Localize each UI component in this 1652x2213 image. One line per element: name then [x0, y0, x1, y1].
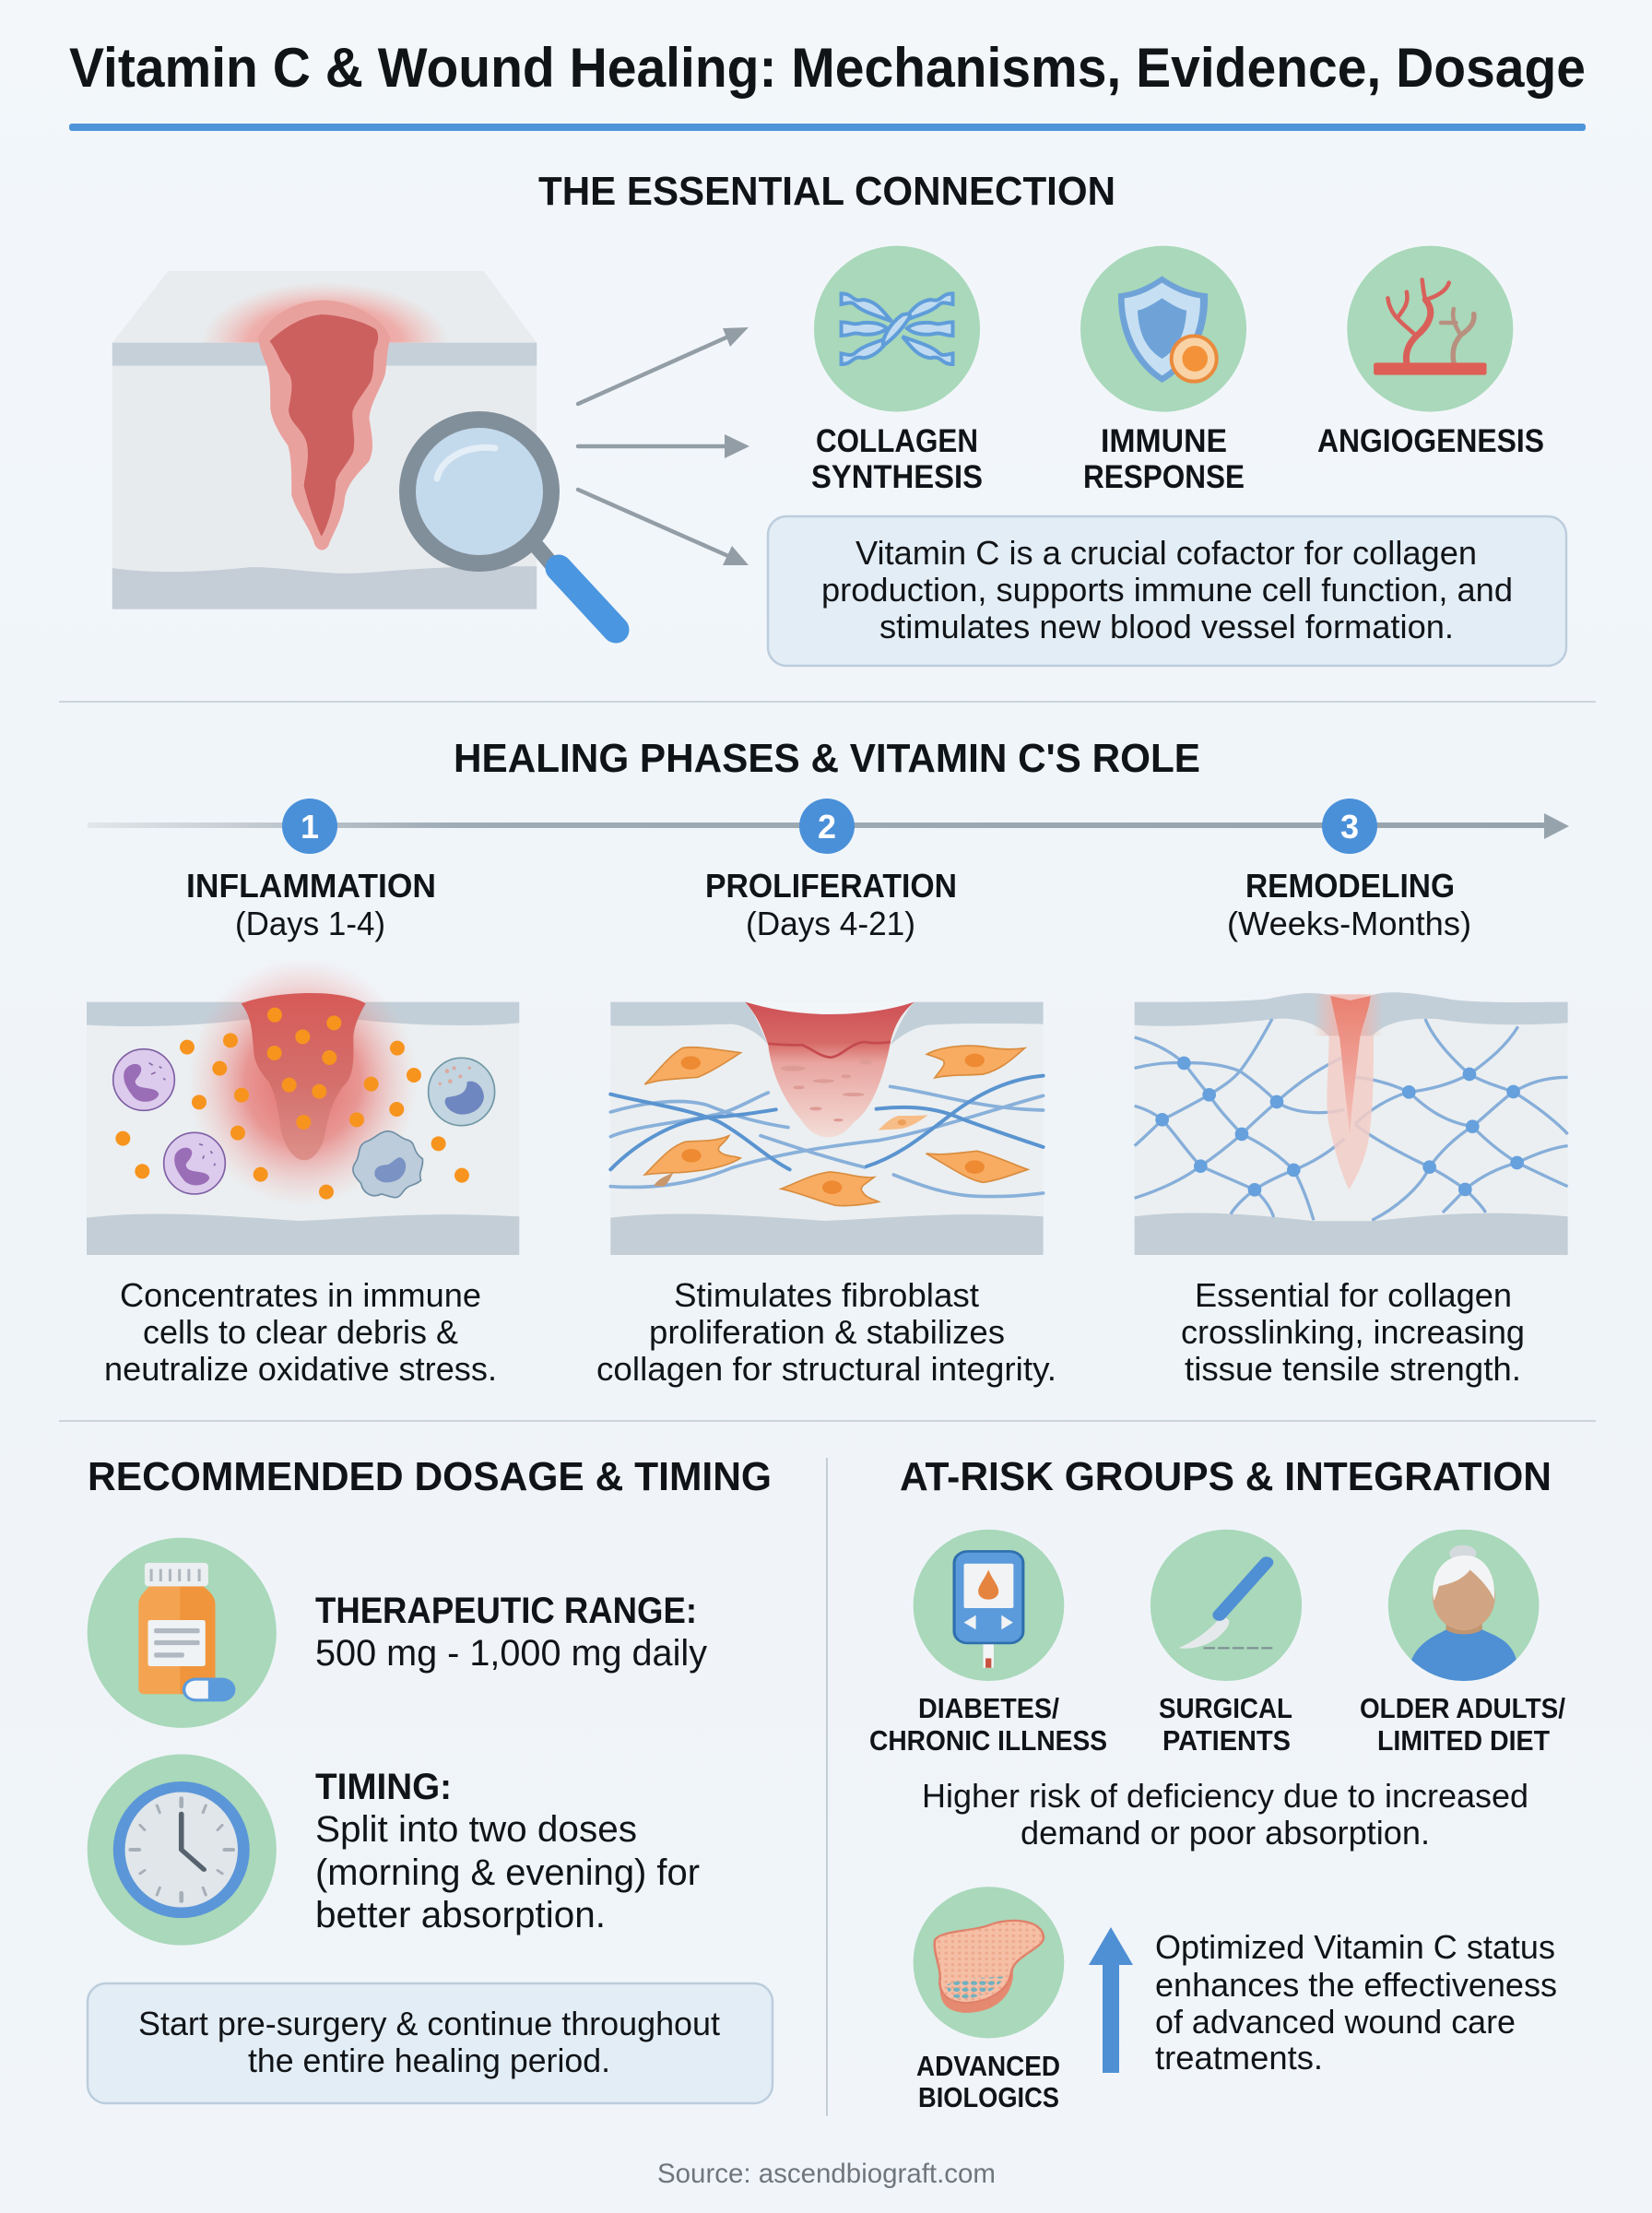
- text: proliferation role: Stimulates fibroblast: [674, 1276, 979, 1314]
- text: inflammation role: [104, 1276, 497, 1388]
- step marker 3: 3: [1340, 808, 1359, 846]
- icon: older adult: [1388, 1530, 1539, 1685]
- callout: start pre-surgery: [88, 1983, 773, 2103]
- phase label: inflammation: (Days 1-4): [235, 905, 385, 942]
- step marker 1: [282, 799, 337, 854]
- text: proliferation role: [596, 1276, 1056, 1388]
- icon: immune shield: [1080, 246, 1246, 412]
- heading: at-risk groups: AT-RISK GROUPS & INTEGRATION: [900, 1454, 1552, 1499]
- text: timing: TIMING:: [315, 1767, 452, 1807]
- step marker 2: [799, 799, 855, 854]
- text: proliferation role: collagen for structural integrity.: [596, 1350, 1056, 1388]
- text: therapeutic range: 500 mg - 1,000 mg daily: [315, 1633, 707, 1674]
- text: optimized vitamin C: enhances the effectiveness: [1155, 1966, 1557, 2004]
- text: higher risk: Higher risk of deficiency due to increased: [922, 1777, 1528, 1815]
- label: advanced biologics: [916, 2050, 1060, 2113]
- label: collagen synthesis: SYNTHESIS: [811, 459, 983, 495]
- text: remodeling role: crosslinking, increasing: [1181, 1313, 1525, 1351]
- source line: Source: ascendbiograft.com: [657, 2159, 996, 2189]
- icon: advanced biologics graft: [914, 1887, 1064, 2038]
- text: inflammation role: neutralize oxidative stress.: [104, 1350, 497, 1388]
- label: advanced biologics: ADVANCED: [916, 2050, 1060, 2082]
- heading: recommended dosage: RECOMMENDED DOSAGE & TIMING: [88, 1454, 772, 1499]
- label: older adults: LIMITED DIET: [1377, 1724, 1550, 1757]
- label: diabetes: [869, 1692, 1107, 1757]
- inflammation glow: [187, 957, 418, 1206]
- label: older adults: [1360, 1692, 1565, 1757]
- label: collagen synthesis: COLLAGEN: [816, 423, 978, 459]
- callout: start pre-surgery: Start pre-surgery & continue throughout: [138, 2005, 720, 2042]
- phase label: remodeling: [1227, 867, 1471, 942]
- immune cell: neutrophil: [164, 1132, 225, 1194]
- phase label: remodeling: (Weeks-Months): [1227, 905, 1471, 942]
- heading: the essential connection: THE ESSENTIAL CONNECTION: [538, 169, 1115, 214]
- label: advanced biologics: BIOLOGICS: [918, 2081, 1059, 2113]
- wound granulation: [745, 1002, 914, 1137]
- phase label: remodeling: REMODELING: [1245, 867, 1455, 905]
- label: older adults: OLDER ADULTS/: [1360, 1692, 1565, 1724]
- panel: remodeling illustration: [1135, 992, 1568, 1255]
- title underline: [69, 124, 1586, 131]
- callout: vitamin C summary: [768, 516, 1566, 666]
- phase label: proliferation: (Days 4-21): [746, 905, 915, 942]
- panel: proliferation illustration: [610, 1002, 1044, 1255]
- vitamin C particles: [115, 1008, 469, 1200]
- wound: [242, 993, 366, 1160]
- immune cell: macrophage: [353, 1131, 423, 1198]
- text: timing: (morning & evening) for: [315, 1852, 700, 1893]
- immune cell: neutrophil: [113, 1049, 174, 1110]
- healed scar: [1314, 994, 1383, 1189]
- text: optimized vitamin C: [1155, 1928, 1557, 2077]
- icon: glucose meter: [914, 1530, 1064, 1681]
- panel: inflammation illustration: [87, 957, 519, 1255]
- label: immune response: RESPONSE: [1083, 459, 1245, 495]
- text: timing: [315, 1767, 700, 1935]
- phase label: inflammation: INFLAMMATION: [186, 867, 436, 905]
- text: inflammation role: Concentrates in immune: [120, 1276, 481, 1314]
- label: surgical patients: PATIENTS: [1162, 1724, 1291, 1757]
- icon: collagen: [814, 246, 980, 412]
- icon: clock: [88, 1754, 277, 1946]
- callout: vitamin C summary: Vitamin C is a crucial cofactor for collagen: [856, 534, 1477, 572]
- title: Vitamin C & Wound Healing: Mechanisms, Evidence, Dosage: [69, 37, 1586, 99]
- timeline: [88, 799, 1569, 854]
- arrow: enhancement up: [1089, 1927, 1133, 2073]
- label: angiogenesis: ANGIOGENESIS: [1317, 423, 1544, 459]
- text: optimized vitamin C: of advanced wound care: [1155, 2003, 1516, 2041]
- step marker 1: 1: [301, 808, 319, 846]
- arrow: to collagen: [578, 327, 749, 404]
- collagen mesh: [1135, 1019, 1568, 1220]
- text: higher risk: demand or poor absorption.: [1021, 1814, 1430, 1852]
- step marker 2: 2: [818, 808, 836, 846]
- callout: start pre-surgery: the entire healing period.: [248, 2041, 610, 2079]
- label: diabetes: DIABETES/: [918, 1692, 1059, 1724]
- callout: vitamin C summary: production, supports immune cell function, and: [821, 571, 1513, 609]
- collagen fibres: [610, 1076, 1044, 1197]
- arrow: to callout: [578, 490, 749, 565]
- label: immune response: IMMUNE: [1101, 423, 1227, 459]
- text: inflammation role: cells to clear debris &: [143, 1313, 458, 1351]
- fibroblast cells: [644, 1046, 1028, 1206]
- text: remodeling role: [1181, 1276, 1525, 1388]
- text: optimized vitamin C: Optimized Vitamin C status: [1155, 1928, 1555, 1966]
- text: timing: Split into two doses: [315, 1809, 637, 1850]
- text: therapeutic range: THERAPEUTIC RANGE:: [315, 1591, 697, 1631]
- text: proliferation role: proliferation & stabilizes: [649, 1313, 1005, 1351]
- text: remodeling role: Essential for collagen: [1195, 1276, 1512, 1314]
- label: surgical patients: [1159, 1692, 1292, 1757]
- callout: vitamin C summary: stimulates new blood vessel formation.: [879, 608, 1454, 645]
- text: remodeling role: tissue tensile strength.: [1185, 1350, 1521, 1388]
- phase label: proliferation: [705, 867, 957, 942]
- heading: healing phases: HEALING PHASES & VITAMIN C'S ROLE: [454, 736, 1200, 781]
- phase label: proliferation: PROLIFERATION: [705, 867, 957, 905]
- step marker 3: [1322, 799, 1377, 854]
- text: therapeutic range: [315, 1591, 707, 1674]
- icon: pill bottle: [88, 1538, 277, 1728]
- icon: magnifying glass: [407, 420, 616, 630]
- illustration: skin block with wound: [112, 271, 537, 609]
- icon: angiogenesis: [1347, 246, 1513, 412]
- label: collagen synthesis: [811, 423, 983, 495]
- arrow: to immune: [578, 434, 749, 458]
- label: diabetes: CHRONIC ILLNESS: [869, 1724, 1107, 1757]
- label: immune response: [1083, 423, 1245, 495]
- text: optimized vitamin C: treatments.: [1155, 2039, 1323, 2077]
- text: higher risk: [922, 1777, 1528, 1852]
- icon: scalpel: [1150, 1530, 1302, 1681]
- immune cell: lymphocyte: [429, 1058, 495, 1126]
- text: timing: better absorption.: [315, 1895, 606, 1935]
- phase label: inflammation: [186, 867, 436, 942]
- label: surgical patients: SURGICAL: [1159, 1692, 1292, 1724]
